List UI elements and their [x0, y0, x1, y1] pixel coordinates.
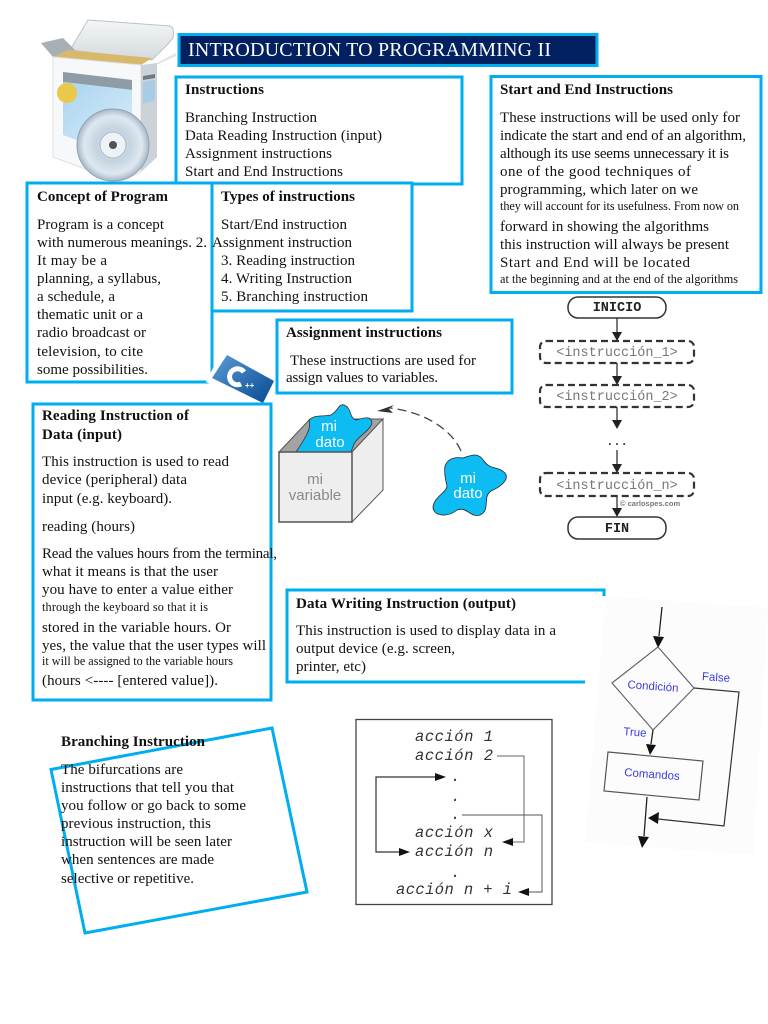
panel: reading instruction of data: stored in the variable hours. Or [42, 620, 231, 636]
panel: start and end instructions: this instruction will always be present [500, 237, 730, 253]
panel: types of instructions [212, 183, 412, 311]
panel: start and end instructions: at the beginning and at the end of the algorithms [500, 272, 738, 286]
panel: branching instruction: The bifurcations are [61, 762, 183, 778]
panel: branching instruction [51, 728, 307, 933]
diagram: action sequence with jumps [356, 720, 552, 904]
panel: instructions: Branching Instruction [185, 110, 318, 126]
title banner [179, 34, 597, 66]
panel: start and end instructions: forward in showing the algorithms [500, 219, 709, 235]
diagram: action sequence with jumps: acción 1 [415, 728, 493, 746]
icon: software box with disc [41, 20, 176, 182]
panel: assignment instructions: Assignment instructions [286, 325, 442, 341]
panel: reading instruction of data: reading (hours) [42, 519, 135, 535]
illustration: variable box with data: dato [315, 434, 345, 451]
flowchart: start to end sequence: <instrucción_1> [556, 346, 678, 361]
panel: start and end instructions: although its use seems unnecessary it is [500, 146, 729, 162]
panel: data writing instruction: output device (e.g. screen, [296, 641, 455, 657]
panel: assignment instructions: assign values to variables. [286, 370, 438, 386]
title banner: INTRODUCTION TO PROGRAMMING II [188, 39, 551, 61]
panel: reading instruction of data: input (e.g. keyboard). [42, 491, 172, 507]
panel: concept of program: planning, a syllabus, [37, 271, 161, 287]
panel: reading instruction of data: you have to enter a value either [42, 582, 233, 598]
flowchart: condition branch: Comandos [624, 767, 680, 783]
panel: types of instructions: 4. Writing Instruction [221, 271, 352, 287]
panel: concept of program: some possibilities. [37, 362, 148, 378]
panel: reading instruction of data: it will be assigned to the variable hours [42, 654, 233, 668]
illustration: variable box with data: variable [289, 487, 341, 504]
panel: start and end instructions [491, 76, 761, 292]
panel: branching instruction: instruction will be seen later [61, 834, 232, 850]
panel: data writing instruction: This instruction is used to display data in a [296, 623, 556, 639]
panel: start and end instructions: one of the good techniques of [500, 164, 691, 180]
panel: instructions: Data Reading Instruction (input) [185, 128, 382, 144]
panel: reading instruction of data: through the keyboard so that it is [42, 600, 208, 614]
panel: assignment instructions [277, 320, 512, 393]
diagram: action sequence with jumps: . [451, 806, 460, 824]
panel: concept of program: television, to cite [37, 344, 143, 360]
flowchart: condition branch: False [701, 671, 730, 685]
panel: start and end instructions: programming, which later on we [500, 182, 698, 198]
panel: types of instructions: Types of instructions [221, 189, 355, 205]
panel: instructions: Assignment instructions [185, 146, 332, 162]
panel: reading instruction of data: This instruction is used to read [42, 454, 230, 470]
flowchart: condition branch: Condición [627, 679, 679, 695]
panel: instructions: Instructions [185, 82, 264, 98]
flowchart: start to end sequence: INICIO [593, 301, 641, 316]
panel: start and end instructions: These instructions will be used only for [500, 110, 740, 126]
panel: branching instruction: selective or repetitive. [61, 871, 194, 887]
panel: branching instruction: previous instruction, this [61, 816, 211, 832]
panel: reading instruction of data: what it means is that the user [42, 564, 218, 580]
panel: types of instructions: 3. Reading instruction [221, 253, 356, 269]
panel: branching instruction: instructions that tell you that [61, 780, 235, 796]
panel: types of instructions: Start/End instruction [221, 217, 348, 233]
flowchart: start to end sequence: FIN [605, 522, 629, 537]
panel: reading instruction of data: device (peripheral) data [42, 472, 187, 488]
panel: instructions [176, 77, 462, 184]
illustration: variable box with data [279, 405, 506, 522]
panel: concept of program: with numerous meanings. 2. [37, 235, 207, 251]
panel: reading instruction of data: yes, the value that the user types will [42, 638, 266, 654]
panel: reading instruction of data [33, 404, 277, 700]
panel: reading instruction of data: Data (input) [42, 427, 122, 443]
flowchart: condition branch [585, 596, 768, 855]
panel: branching instruction: when sentences are made [61, 852, 214, 868]
panel: data writing instruction [287, 590, 604, 682]
illustration: variable box with data: mi [307, 471, 323, 488]
diagram: action sequence with jumps: acción 2 [415, 747, 493, 765]
panel: data writing instruction: Data Writing Instruction (output) [296, 596, 516, 612]
diagram: action sequence with jumps: acción n + i [396, 881, 512, 899]
panel: assignment instructions: These instructions are used for [290, 353, 476, 369]
panel: start and end instructions: Start and End Instructions [500, 82, 673, 98]
panel: branching instruction: you follow or go back to some [61, 798, 246, 814]
panel: data writing instruction: printer, etc) [296, 659, 366, 675]
panel: concept of program: radio broadcast or [37, 325, 146, 341]
illustration: variable box with data: dato [453, 485, 483, 502]
diagram: action sequence with jumps: . [451, 788, 460, 806]
illustration: variable box with data: mi [460, 470, 476, 487]
flowchart: start to end sequence: ... [606, 435, 628, 449]
panel: types of instructions: 5. Branching instruction [221, 289, 368, 305]
flowchart: start to end sequence: <instrucción_2> [556, 390, 678, 405]
panel: start and end instructions: they will account for its usefulness. From now on [500, 199, 739, 213]
panel: concept of program: Concept of Program [37, 189, 168, 205]
panel: reading instruction of data: Reading Instruction of [42, 408, 190, 424]
panel: start and end instructions: indicate the start and end of an algorithm, [500, 128, 746, 144]
diagram: action sequence with jumps: acción x [415, 824, 494, 842]
panel: branching instruction: Branching Instruction [61, 734, 206, 750]
panel: concept of program: Program is a concept [37, 217, 165, 233]
flowchart: start to end sequence: © carlospes.com [620, 499, 680, 508]
icon: C++ card: ++ [245, 381, 255, 390]
diagram: action sequence with jumps: acción n [415, 843, 493, 861]
panel: concept of program: It may be a [37, 253, 107, 269]
diagram: action sequence with jumps: . [451, 864, 460, 882]
panel: concept of program: a schedule, a [37, 289, 115, 305]
panel: reading instruction of data: Read the values hours from the terminal, [42, 546, 277, 562]
panel: reading instruction of data: (hours <---- [entered value]). [42, 673, 218, 689]
panel: start and end instructions: Start and End will be located [500, 255, 690, 271]
flowchart: start to end sequence: <instrucción_n> [556, 479, 678, 494]
icon: C++ card [206, 350, 276, 406]
panel: concept of program: thematic unit or a [37, 307, 143, 323]
illustration: variable box with data: mi [321, 418, 337, 435]
diagram: action sequence with jumps: . [451, 768, 460, 786]
panel: types of instructions: Assignment instruction [212, 235, 352, 251]
flowchart: start to end sequence [540, 297, 694, 539]
flowchart: condition branch: True [623, 726, 647, 740]
panel: concept of program [27, 183, 212, 382]
panel: instructions: Start and End Instructions [185, 164, 343, 180]
